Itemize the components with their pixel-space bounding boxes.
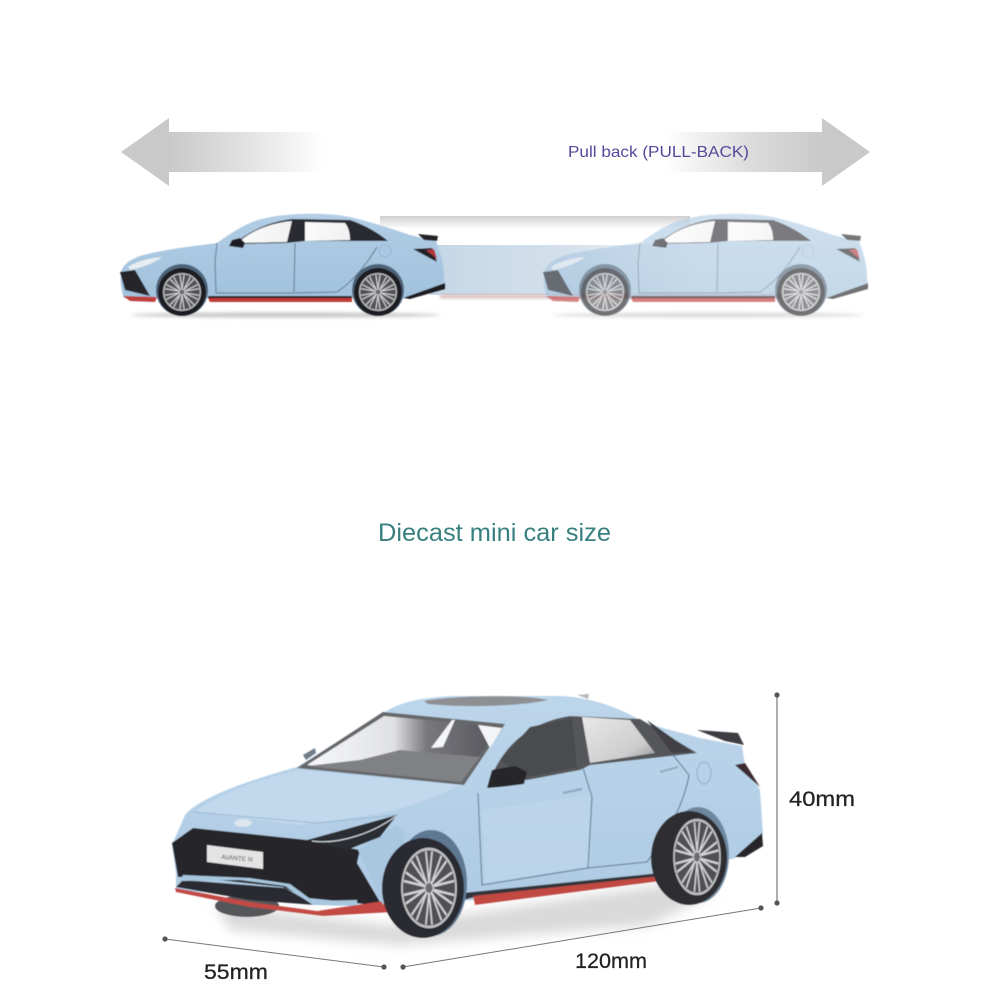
spoiler	[697, 730, 744, 745]
roof and sunroof	[424, 696, 548, 706]
car: starting position	[120, 214, 445, 318]
windshield	[297, 712, 505, 785]
door handles	[563, 767, 678, 793]
hood crease	[193, 812, 397, 823]
dimension: width 55mm	[162, 936, 387, 984]
far front tyre	[215, 895, 279, 917]
sill	[463, 873, 660, 900]
door panel highlight	[482, 795, 590, 884]
arrow: right	[665, 118, 870, 186]
ground shadow	[215, 885, 720, 945]
far mirror	[303, 748, 316, 760]
motion blur between the cars	[380, 216, 780, 298]
dimension: height 40mm: 40mm	[789, 788, 855, 811]
hood logo	[234, 819, 252, 827]
front wheel	[382, 830, 467, 938]
arrow: left	[121, 118, 325, 186]
front fascia	[172, 828, 383, 907]
fuel cap	[697, 762, 711, 784]
car: pull-back end position, faded	[543, 214, 868, 318]
dimension: height 40mm	[774, 692, 855, 906]
dimension: length 120mm: 120mm	[575, 950, 647, 973]
dimension: length 120mm	[400, 905, 764, 973]
number plate: AVANTE N	[221, 854, 253, 864]
heading: Diecast mini car size	[378, 519, 611, 547]
mirror	[487, 766, 527, 788]
door lines	[478, 755, 689, 885]
side windows	[492, 716, 697, 780]
headlight	[307, 815, 397, 850]
hood highlight	[195, 770, 460, 825]
body	[172, 696, 763, 905]
car: three-quarter view	[172, 694, 763, 945]
dimension: width 55mm: 55mm	[204, 961, 268, 984]
number plate	[207, 845, 263, 869]
label: pull back: Pull back (PULL-BACK)	[568, 144, 749, 161]
rear wheel	[651, 807, 729, 905]
rear diffuser	[735, 833, 763, 857]
tail light	[735, 763, 760, 787]
